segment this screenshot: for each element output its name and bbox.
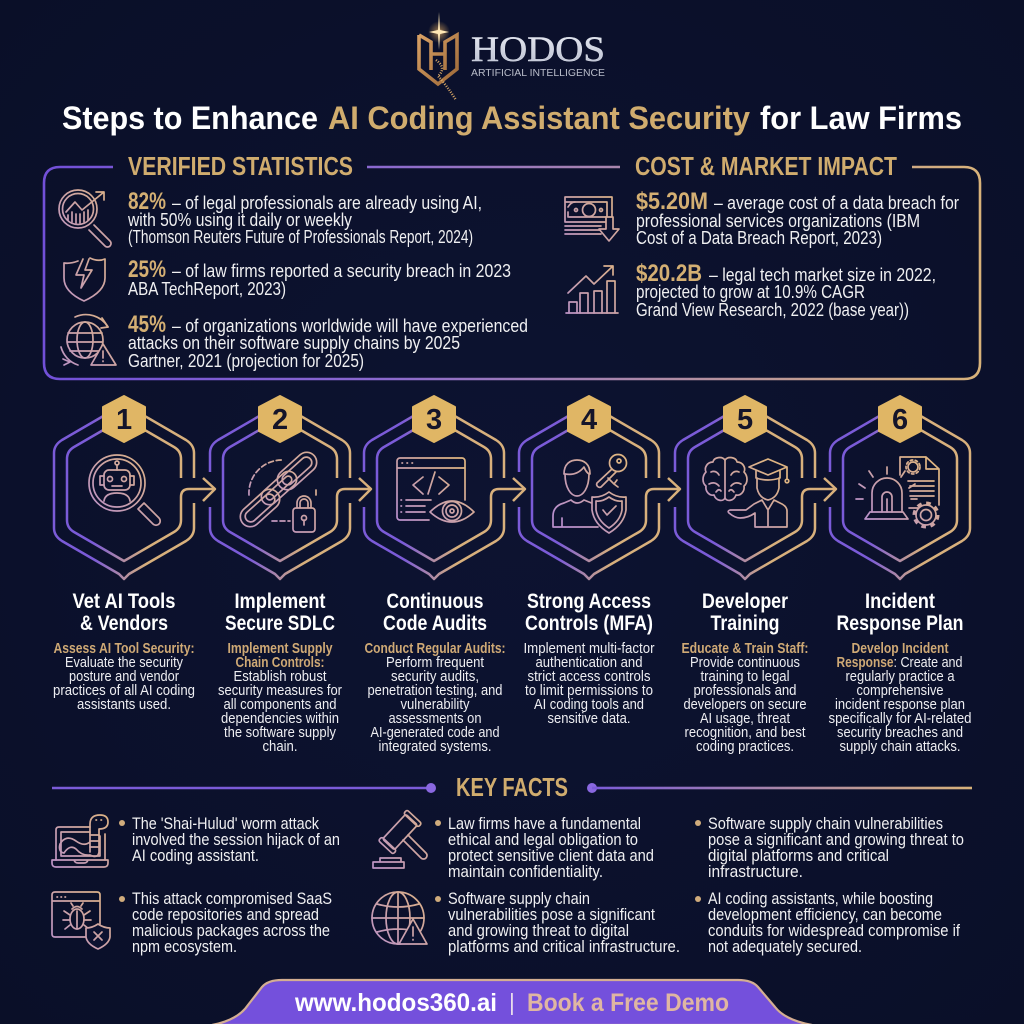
- stat: 5.20M: [636, 188, 959, 248]
- stat: 5.20M: Cost of a Data Breach Report, 2023): [636, 227, 882, 248]
- fact: supply chain vulnerabilities: infrastructure.: [708, 862, 803, 881]
- icon: logo shield: [419, 35, 457, 100]
- icon: user key and shield: [553, 454, 626, 533]
- icon: globe with warning triangle: [372, 892, 427, 944]
- key facts divider: [52, 783, 972, 793]
- step 5 text: recognition, and best: [684, 725, 806, 741]
- fact: repositories compromised: This attack compromised SaaS: [132, 889, 332, 908]
- title: AI Coding Assistant Security: [328, 100, 750, 136]
- fact: supply chain vulnerabilities: [695, 814, 964, 881]
- step 4 text: to limit permissions to: [525, 683, 653, 699]
- heading: cost and market impact: COST & MARKET IMPACT: [635, 153, 897, 181]
- badge 5: [724, 396, 766, 442]
- step 5 text: professionals and: [694, 683, 796, 699]
- fact: ethical obligation: maintain confidentiality.: [448, 862, 603, 881]
- step 2 text: Secure SDLC: [225, 612, 335, 635]
- stat: 25 percent: [128, 256, 511, 299]
- step 6 text: Response Plan: [836, 612, 964, 635]
- footer banner: [212, 980, 812, 1024]
- icon: money with down arrow: [565, 197, 619, 241]
- fact: ethical obligation: Law firms have a fundamental: [448, 814, 641, 833]
- step 2 text: chain.: [262, 739, 298, 755]
- stat: 82 percent: – of legal professionals are already using AI,: [172, 192, 482, 213]
- step 2 text: Implement Supply: [228, 641, 333, 657]
- heading: verified statistics: VERIFIED STATISTICS: [128, 153, 353, 181]
- step 4 text: Controls (MFA): [525, 612, 653, 635]
- step 4 text: sensitive data.: [548, 711, 630, 727]
- stat: 25 percent: 25%: [128, 256, 166, 283]
- fact: coding assistants conduits: not adequately secured.: [708, 937, 862, 956]
- step 3 text: Continuous: [386, 590, 484, 613]
- step 1 text: Assess AI Tool Security:: [54, 641, 194, 657]
- badge 4: [568, 396, 610, 442]
- step 5 text: AI usage, threat: [700, 711, 790, 727]
- fact: supply chain vulnerabilities: pose a significant and growing threat to: [708, 830, 964, 849]
- fact: supply chain vulnerabilities: Software supply chain vulnerabilities: [708, 814, 943, 833]
- step 5 text: coding practices.: [696, 739, 794, 755]
- stat: 45 percent: – of organizations worldwide will have experienced: [172, 315, 528, 336]
- step 2 text: Establish robust: [234, 669, 326, 685]
- icon: bug window with shield: [52, 892, 110, 949]
- step 3 text: Conduct Regular Audits:: [364, 641, 506, 657]
- step 5 text: developers on secure: [684, 697, 806, 713]
- stat: 20.2B: $20.2B: [636, 260, 702, 287]
- step 4 text: AI coding tools and: [534, 697, 644, 713]
- badge 1: 1: [116, 404, 132, 436]
- stat: 5.20M: $5.20M: [636, 188, 708, 215]
- step 2 text: dependencies within: [221, 711, 339, 727]
- fact: coding assistants conduits: development efficiency, can become: [708, 905, 942, 924]
- badge 2: [259, 396, 301, 442]
- fact: worm attack: The 'Shai-Hulud' worm attack: [132, 814, 319, 833]
- icon: logo star: [428, 12, 450, 50]
- fact: supply chain threat: platforms and critical infrastructure.: [448, 937, 680, 956]
- step 4 text: strict access controls: [528, 669, 650, 685]
- step 3 text: [364, 590, 506, 755]
- fact: worm attack: AI coding assistant.: [132, 846, 259, 865]
- title: [62, 100, 962, 136]
- icon: growth bar chart: [566, 266, 618, 313]
- icon: magnifier chart: [59, 190, 111, 247]
- fact: supply chain threat: [435, 889, 680, 956]
- stat: 20.2B: projected to grow at 10.9% CAGR: [636, 281, 865, 302]
- step 3 text: Code Audits: [383, 612, 487, 635]
- fact: supply chain vulnerabilities: digital platforms and critical: [708, 846, 889, 865]
- logo wordmark: HODOS: [471, 29, 605, 69]
- badge 3: 3: [426, 404, 442, 436]
- step 3 text: vulnerability: [400, 697, 470, 713]
- step 1 text: posture and vendor: [69, 669, 179, 685]
- step 1 text: Vet AI Tools: [72, 590, 176, 613]
- step 4 text: Implement multi-factor: [524, 641, 655, 657]
- step 3 hexagon: [364, 396, 525, 579]
- fact: ethical obligation: [435, 814, 654, 881]
- fact: supply chain threat: vulnerabilities pose a significant: [448, 905, 655, 924]
- icon: globe with warning: [61, 315, 116, 365]
- step 5 text: Training: [710, 612, 780, 635]
- stat: 45 percent: [128, 311, 528, 371]
- fact: coding assistants conduits: [695, 889, 960, 956]
- logo: [419, 12, 605, 100]
- stat: 82 percent: (Thomson Reuters Future of Professionals Report, 2024): [128, 226, 473, 247]
- step 1 text: & Vendors: [80, 612, 168, 635]
- step 2 text: the software supply: [224, 725, 337, 741]
- step 6 text: regularly practice a: [846, 669, 955, 685]
- fact: repositories compromised: malicious packages across the: [132, 921, 330, 940]
- stat: 45 percent: attacks on their software supply chains by 2025: [128, 332, 460, 353]
- step 1 hexagon: [54, 396, 215, 579]
- step 5 text: [682, 590, 808, 755]
- panel: statistics frame: [44, 167, 980, 379]
- badge 3: [413, 396, 455, 442]
- step 5 text: Educate & Train Staff:: [682, 641, 808, 657]
- icon: laptop with worm: [52, 815, 108, 867]
- step 4 text: authentication and: [536, 655, 642, 671]
- title: Steps to Enhance: [62, 100, 318, 136]
- step 3 text: Perform frequent: [386, 655, 484, 671]
- icon: brain and graduate: [703, 458, 789, 527]
- fact: repositories compromised: npm ecosystem.: [132, 937, 237, 956]
- badge 6: [879, 396, 921, 442]
- stat: 20.2B: Grand View Research, 2022 (base year)): [636, 299, 909, 320]
- step 1 text: assistants used.: [77, 697, 171, 713]
- icon: code window with eye: [397, 458, 474, 522]
- fact: coding assistants conduits: AI coding assistants, while boosting: [708, 889, 933, 908]
- stat: 5.20M: – average cost of a data breach for: [714, 192, 959, 213]
- logo tagline: ARTIFICIAL INTELLIGENCE: [471, 67, 605, 79]
- step 6 text: comprehensive: [856, 683, 944, 699]
- arrow 1: [203, 478, 215, 501]
- step 3 text: integrated systems.: [378, 739, 492, 755]
- step 3 text: AI-generated code and: [370, 725, 500, 741]
- step 3 text: penetration testing, and: [368, 683, 502, 699]
- step 6 text: specifically for AI-related: [828, 711, 972, 727]
- step 4 text: Strong Access: [527, 590, 651, 613]
- badge 2: 2: [272, 404, 288, 436]
- icon: chain link with padlock: [236, 448, 321, 532]
- step 3 text: security audits,: [391, 669, 479, 685]
- step 5 text: Developer: [702, 590, 788, 613]
- fact: worm attack: [119, 814, 340, 865]
- step 4 hexagon: [519, 396, 680, 579]
- icon: robot in magnifier: [89, 455, 160, 525]
- step 2 text: security measures for: [218, 683, 342, 699]
- arrow 4: [668, 478, 680, 501]
- badge 6: 6: [892, 404, 908, 436]
- arrow 5: [824, 478, 836, 501]
- stat: 25 percent: – of law firms reported a security breach in 2023: [172, 260, 511, 281]
- fact: repositories compromised: code repositories and spread: [132, 905, 319, 924]
- stat: 82 percent: 82%: [128, 188, 166, 215]
- fact: supply chain threat: and growing threat to digital: [448, 921, 629, 940]
- step 2 text: Chain Controls:: [236, 655, 324, 671]
- fact: supply chain threat: Software supply chain: [448, 889, 590, 908]
- step 6 text: [828, 590, 972, 755]
- stat: 82 percent: [127, 188, 482, 247]
- stat: 20.2B: – legal tech market size in 2022,: [709, 264, 936, 285]
- step 6 text: : Create and: [894, 655, 962, 671]
- fact: ethical obligation: ethical and legal obligation to: [448, 830, 638, 849]
- step 2 hexagon: [210, 396, 371, 579]
- badge 5: 5: [737, 404, 753, 436]
- footer separator: [511, 993, 513, 1015]
- stat: 45 percent: 45%: [128, 311, 166, 338]
- step 2 text: Implement: [234, 590, 326, 613]
- heading: key facts: KEY FACTS: [456, 774, 568, 802]
- fact: coding assistants conduits: conduits for widespread compromise if: [708, 921, 960, 940]
- fact: ethical obligation: protect sensitive client data and: [448, 846, 654, 865]
- footer website: www.hodos360.ai: [294, 989, 497, 1017]
- stat: 20.2B: [636, 260, 936, 320]
- step 1 text: practices of all AI coding: [53, 683, 195, 699]
- step 6 text: Response: [836, 655, 894, 671]
- fact: repositories compromised: [119, 889, 332, 956]
- step 2 text: [218, 590, 342, 755]
- step 6 text: security breaches and: [837, 725, 963, 741]
- footer call to action: Book a Free Demo: [527, 989, 729, 1017]
- arrow 2: [359, 478, 371, 501]
- arrow 3: [513, 478, 525, 501]
- step 5 text: Provide continuous: [690, 655, 800, 671]
- step 1 text: Evaluate the security: [65, 655, 184, 671]
- icon: shield with bolt: [64, 258, 105, 301]
- step 1 text: [53, 590, 195, 713]
- step 4 text: [524, 590, 655, 727]
- step 6 text: Incident: [865, 590, 935, 613]
- step 5 hexagon: [675, 396, 836, 579]
- step 6 text: incident response plan: [835, 697, 965, 713]
- stat: 45 percent: Gartner, 2021 (projection for 2025): [128, 350, 364, 371]
- step 3 text: assessments on: [388, 711, 482, 727]
- badge 1: [103, 396, 145, 442]
- title: for Law Firms: [760, 100, 962, 136]
- fact: worm attack: involved the session hijack of an: [132, 830, 340, 849]
- icon: siren document and gear: [856, 457, 939, 526]
- step 6 hexagon: [830, 396, 970, 579]
- step 6 text: supply chain attacks.: [840, 739, 960, 755]
- stat: 82 percent: with 50% using it daily or weekly: [127, 209, 353, 230]
- stat: 5.20M: professional services organizations (IBM: [636, 210, 920, 231]
- step 2 text: all components and: [224, 697, 336, 713]
- icon: gavel: [373, 810, 427, 868]
- badge 4: 4: [581, 404, 597, 436]
- stat: 25 percent: ABA TechReport, 2023): [128, 278, 286, 299]
- step 5 text: training to legal: [700, 669, 790, 685]
- step 6 text: Develop Incident: [852, 641, 949, 657]
